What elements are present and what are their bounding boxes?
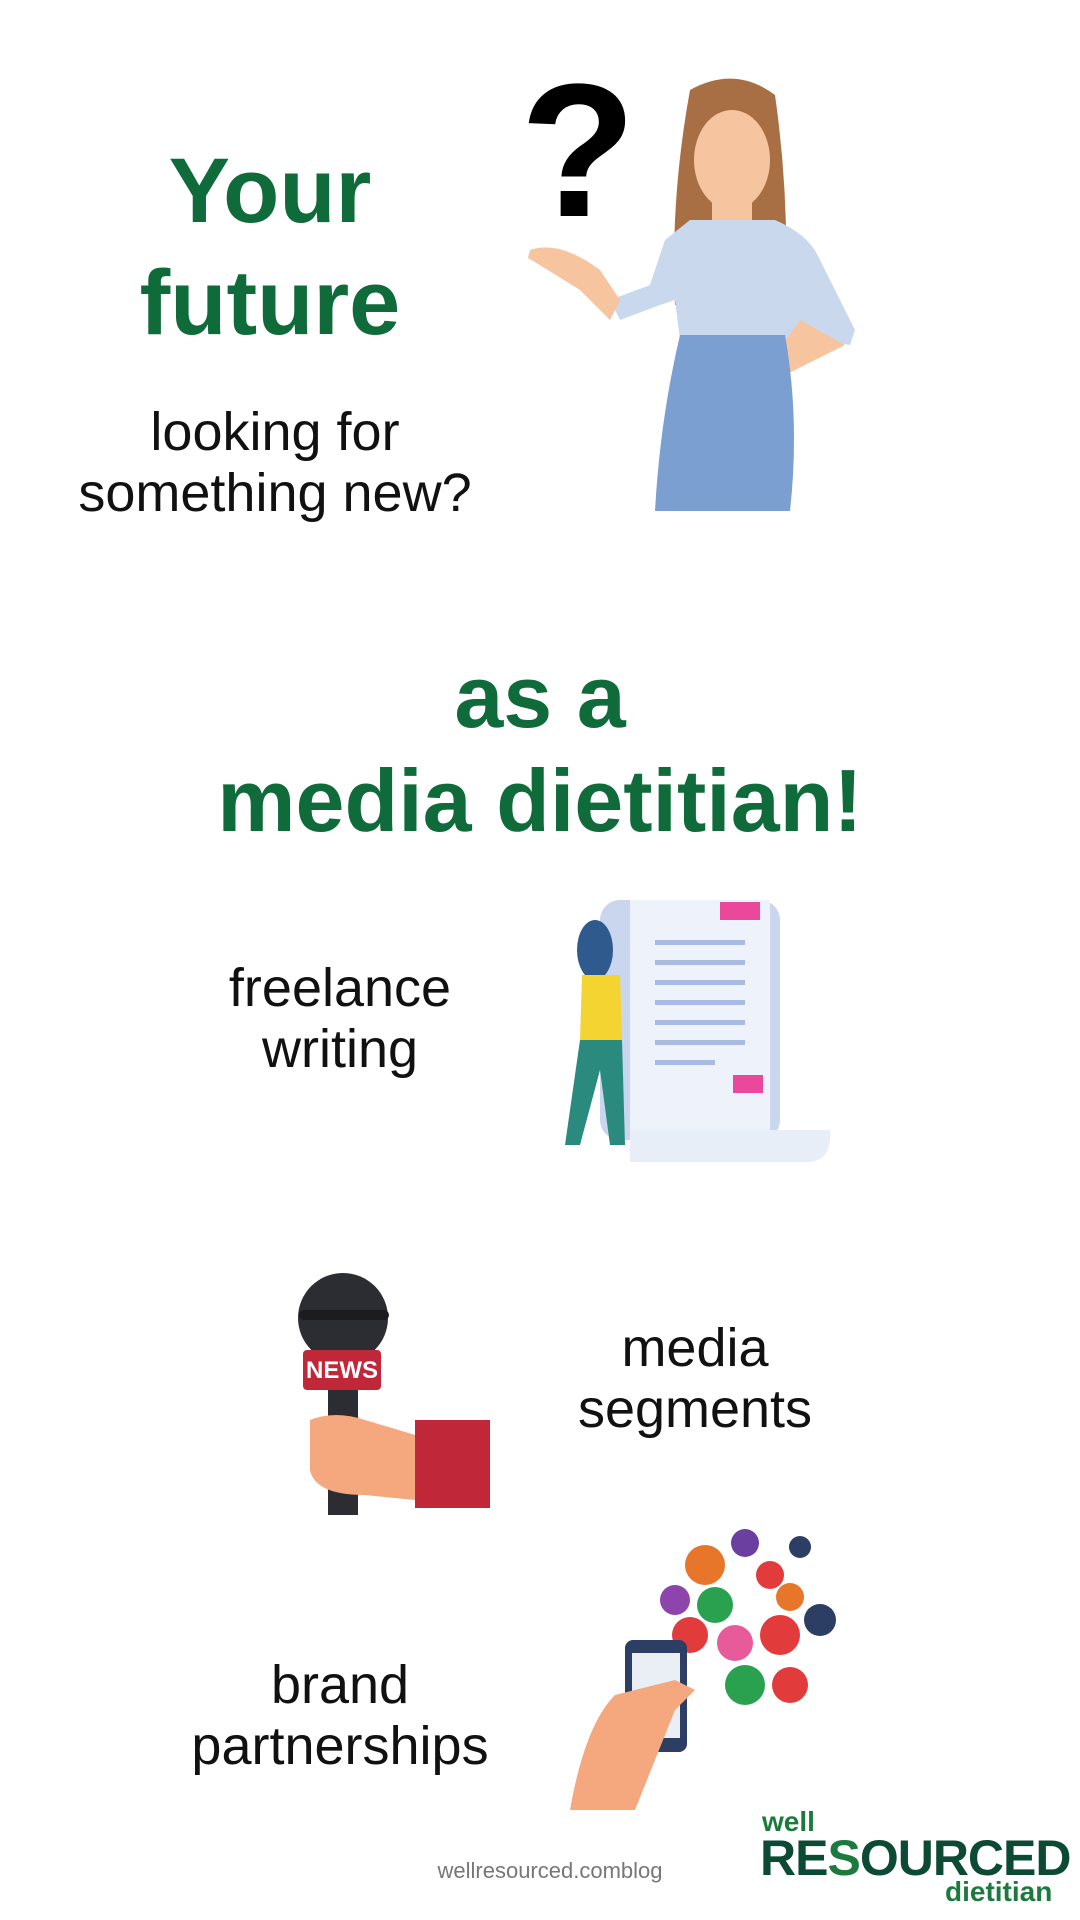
text: freelance writing: writing — [262, 1019, 418, 1079]
text: brand partnerships: brand — [271, 1655, 409, 1715]
text: media segments — [578, 1318, 812, 1439]
logo: well resourced dietitian: well — [762, 1806, 815, 1837]
subtitle: looking for something new: something new? — [78, 463, 472, 523]
text: brand partnerships: partnerships — [191, 1716, 489, 1776]
text: media segments: segments — [578, 1379, 812, 1439]
title: Your future — [140, 140, 400, 354]
footer: url: wellresourced.comblog — [438, 1858, 662, 1883]
text: freelance writing: freelance — [229, 958, 451, 1018]
title: Your future: future — [140, 252, 400, 354]
icon: question mark: ? — [520, 45, 636, 257]
subtitle: looking for something new: looking for — [150, 402, 400, 462]
title: Your future: Your — [169, 140, 371, 242]
text: freelance writing — [229, 958, 451, 1079]
subtitle: looking for something new — [78, 402, 472, 523]
illustration: woman — [528, 78, 855, 511]
illustration: hand with phone and social icons — [570, 1529, 836, 1810]
illustration: hand holding NEWS microphone: NEWS — [306, 1357, 378, 1384]
illustration: writer with document — [565, 900, 830, 1162]
illustration: hand holding NEWS microphone — [298, 1273, 490, 1515]
text: media segments: media — [621, 1318, 769, 1378]
logo: well resourced dietitian: RESOURCED — [760, 1830, 1071, 1886]
heading: as a media dietitian — [217, 647, 863, 850]
logo: well resourced dietitian — [760, 1806, 1071, 1907]
text: brand partnerships — [191, 1655, 489, 1776]
heading: as a media dietitian: media dietitian! — [217, 751, 863, 850]
logo: well resourced dietitian: dietitian — [945, 1876, 1052, 1907]
heading: as a media dietitian: as a — [454, 647, 626, 746]
